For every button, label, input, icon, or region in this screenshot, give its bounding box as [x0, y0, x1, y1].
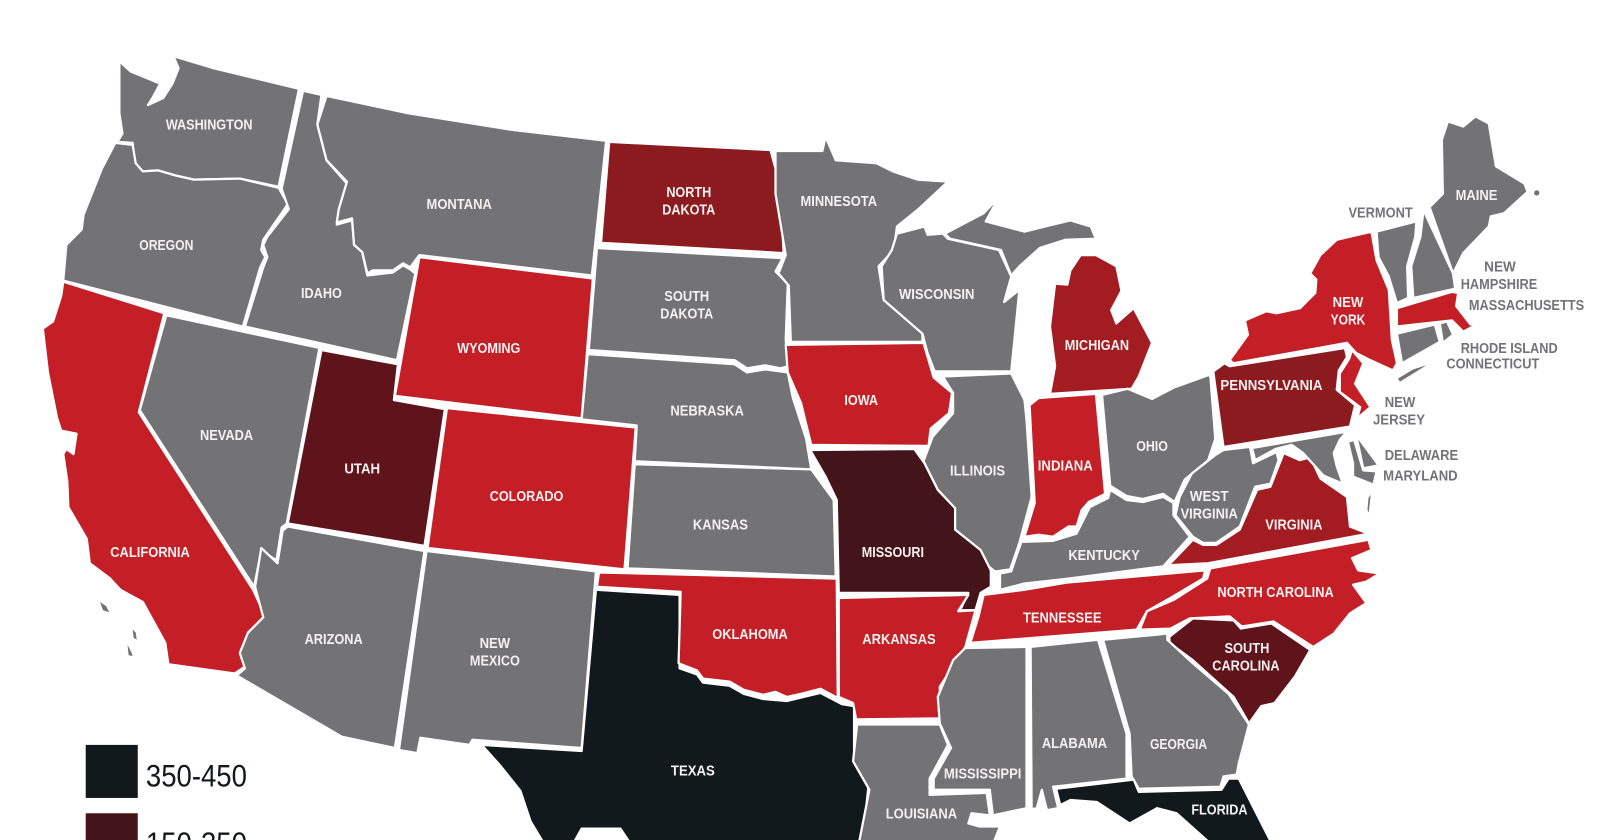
- state: Alabama: ALABAMA: [1042, 736, 1107, 752]
- state: Oklahoma: [597, 572, 838, 698]
- state: Kentucky: KENTUCKY: [1068, 548, 1140, 564]
- state: Texas: TEXAS: [671, 764, 715, 780]
- state: Michigan: MICHIGAN: [1065, 338, 1129, 354]
- state: Iowa: [786, 343, 952, 446]
- state: Kentucky: [1000, 490, 1190, 590]
- state: Florida: FLORIDA: [1191, 802, 1248, 818]
- state: Iowa: IOWA: [844, 393, 878, 409]
- label: Vermont: VERMONT: [1348, 205, 1413, 221]
- state: North Carolina: [1140, 540, 1380, 647]
- state: New York: [1230, 232, 1397, 370]
- state: Indiana: INDIANA: [1038, 458, 1093, 474]
- state: Minnesota: [776, 137, 948, 342]
- label: New Hampshire: [1461, 259, 1537, 293]
- state: Maine: MAINE: [1456, 188, 1498, 204]
- state: Washington: [117, 56, 299, 187]
- state: Texas: [482, 590, 868, 840]
- icon: Maine island: [1534, 190, 1539, 196]
- state: Idaho: [245, 91, 415, 360]
- state: Nevada: [140, 315, 319, 587]
- state: Maryland: [1252, 432, 1377, 516]
- state: North Dakota: NORTH: [666, 185, 711, 201]
- label: Rhode Island: RHODE ISLAND: [1461, 341, 1558, 357]
- state: Rhode Island: [1440, 321, 1453, 343]
- state: Mississippi: [934, 647, 1027, 815]
- state: Massachusetts: [1397, 292, 1479, 332]
- state: Indiana: [1024, 394, 1105, 537]
- state: Colorado: COLORADO: [490, 489, 563, 505]
- state: South Carolina: CAROLINA: [1212, 658, 1280, 674]
- state: Arizona: ARIZONA: [305, 632, 363, 648]
- state: Oklahoma: OKLAHOMA: [712, 627, 788, 643]
- legend label: 350-450: 350-450: [146, 758, 247, 794]
- state: New Mexico: NEW: [480, 636, 510, 652]
- label: Delaware: DELAWARE: [1385, 448, 1458, 464]
- state: Idaho: IDAHO: [301, 286, 342, 302]
- state: Oregon: OREGON: [139, 238, 193, 254]
- state: South Dakota: DAKOTA: [660, 306, 714, 322]
- state: Kansas: KANSAS: [693, 518, 748, 534]
- state: South Carolina: SOUTH: [1224, 641, 1269, 657]
- state: Tennessee: TENNESSEE: [1023, 610, 1102, 626]
- state: Nevada: NEVADA: [200, 428, 253, 444]
- state: New Jersey: [1340, 350, 1370, 418]
- state: Washington: WASHINGTON: [166, 118, 253, 134]
- state: North Carolina: NORTH CAROLINA: [1217, 585, 1334, 601]
- state: Delaware: [1356, 435, 1379, 468]
- state: New Mexico: [399, 551, 596, 753]
- legend: [86, 745, 247, 840]
- state: Oregon: [63, 143, 288, 327]
- state: Louisiana: LOUISIANA: [886, 806, 957, 822]
- state: Colorado: [428, 408, 636, 569]
- state: Virginia: VIRGINIA: [1265, 518, 1323, 534]
- state: Michigan: [1050, 255, 1152, 394]
- label: New Jersey: [1373, 395, 1425, 428]
- label: New Jersey: JERSEY: [1373, 412, 1425, 428]
- state: North Dakota: DAKOTA: [662, 202, 716, 218]
- label: Massachusetts: MASSACHUSETTS: [1469, 298, 1584, 314]
- state: Tennessee: [970, 570, 1205, 643]
- state: California: CALIFORNIA: [110, 545, 190, 561]
- state: Missouri: MISSOURI: [862, 545, 924, 561]
- state: Utah: [288, 350, 445, 546]
- state: Wisconsin: WISCONSIN: [899, 287, 974, 303]
- label: New Hampshire: NEW: [1484, 259, 1516, 275]
- state: New York: YORK: [1331, 312, 1366, 328]
- state: Georgia: GEORGIA: [1150, 737, 1207, 753]
- state: South Dakota: [589, 248, 788, 368]
- state: Vermont: [1377, 221, 1416, 303]
- state: Utah: UTAH: [344, 461, 380, 477]
- state: Pennsylvania: [1213, 348, 1355, 447]
- state: South Carolina: [1169, 618, 1310, 723]
- state: Montana: MONTANA: [427, 197, 492, 213]
- state: Arkansas: ARKANSAS: [862, 632, 936, 648]
- state: Florida: [1056, 779, 1273, 840]
- state: Montana: [317, 96, 606, 276]
- state: Georgia: [1103, 634, 1249, 789]
- state: Illinois: ILLINOIS: [950, 464, 1005, 480]
- label: New Jersey: NEW: [1385, 395, 1415, 411]
- state: Maine: [1430, 116, 1528, 273]
- state: Wyoming: WYOMING: [457, 341, 520, 357]
- state: Wisconsin: [882, 227, 1019, 371]
- state: Ohio: OHIO: [1136, 439, 1168, 455]
- state: New Hampshire: [1411, 210, 1455, 298]
- state: Louisiana: [853, 724, 1000, 840]
- state: West Virginia: VIRGINIA: [1181, 506, 1238, 522]
- state: New Mexico: MEXICO: [470, 653, 520, 669]
- label: New Hampshire: HAMPSHIRE: [1461, 277, 1537, 293]
- state: Ohio: [1102, 374, 1215, 502]
- state: West Virginia: WEST: [1190, 489, 1229, 505]
- icon: California channel islands: [100, 602, 137, 656]
- state: Virginia: [1168, 453, 1368, 565]
- state: Minnesota: MINNESOTA: [801, 194, 877, 210]
- state: Nebraska: [582, 354, 811, 469]
- state: West Virginia: [1176, 447, 1279, 543]
- state: Michigan upper peninsula: [945, 197, 1096, 276]
- state: Connecticut: [1397, 324, 1440, 363]
- state: Arkansas: [839, 595, 976, 719]
- state: South Dakota: SOUTH: [664, 289, 709, 305]
- state: Missouri: [810, 449, 991, 610]
- state: Arizona: [237, 527, 424, 748]
- state: Alabama: [1031, 640, 1127, 810]
- label: Connecticut: CONNECTICUT: [1446, 356, 1539, 372]
- state: Wyoming: [395, 257, 593, 418]
- state: Kansas: [628, 464, 836, 577]
- label: Maryland: MARYLAND: [1383, 469, 1458, 485]
- legend swatch: 150-350: [86, 813, 138, 840]
- state: New York: NEW: [1333, 295, 1363, 311]
- icon: Long Island: [1398, 365, 1427, 382]
- state: North Dakota: [601, 142, 784, 253]
- state: Nebraska: NEBRASKA: [670, 403, 744, 419]
- state: Mississippi: MISSISSIPPI: [944, 767, 1021, 783]
- state: Pennsylvania: PENNSYLVANIA: [1220, 378, 1323, 394]
- state: California: [43, 282, 265, 673]
- state: Illinois: [923, 373, 1032, 571]
- legend swatch: 350-450: [86, 745, 138, 798]
